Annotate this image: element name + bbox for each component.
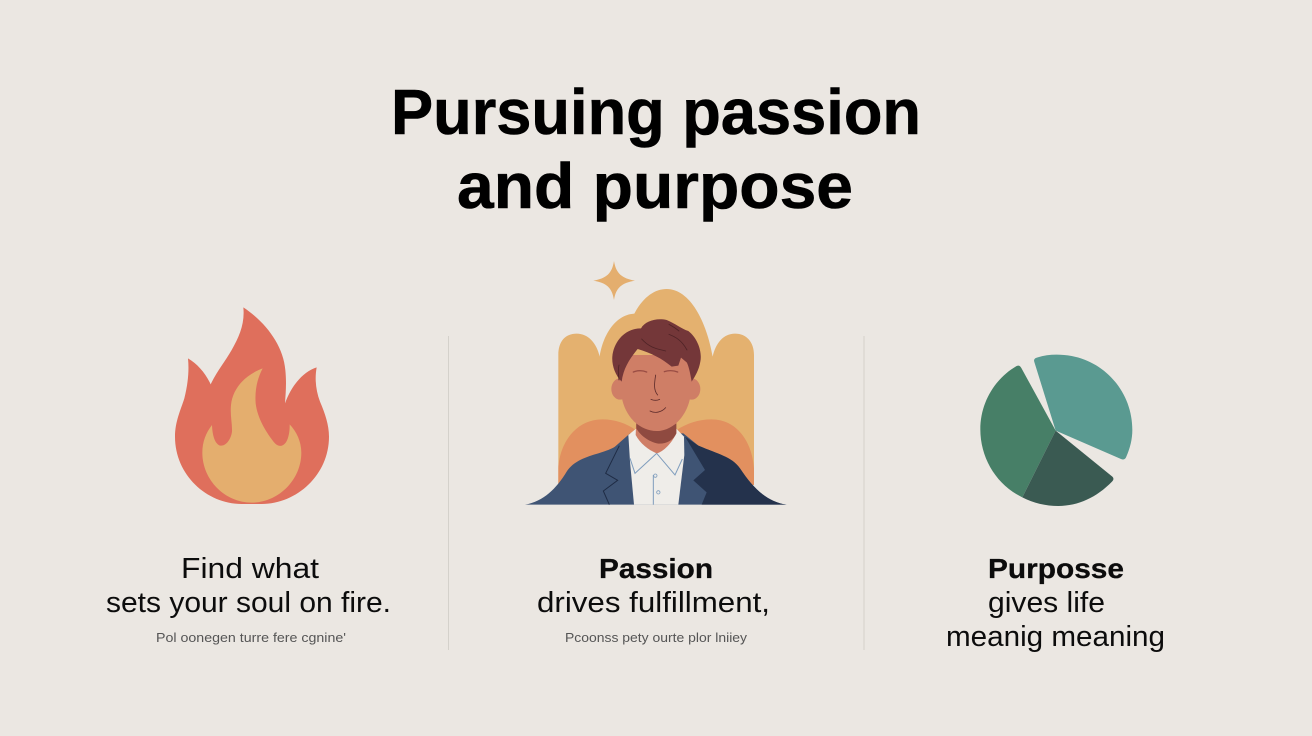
icon: flame: [175, 307, 329, 504]
jacket: [525, 433, 787, 505]
lapel lines: [603, 446, 619, 505]
title: [391, 76, 921, 222]
small print: Pol oonegen turre fere cgnine': [156, 630, 346, 645]
title: Pursuing passion: [391, 76, 921, 148]
caption: find what: sets your soul on fire.: [106, 587, 391, 619]
slice: teal: [1034, 355, 1132, 459]
caption: find what: [106, 553, 391, 619]
neck: [636, 418, 676, 453]
facial features: [618, 324, 687, 412]
caption: purpose gives life meaning: meanig meaning: [946, 621, 1165, 653]
hair: [612, 319, 701, 382]
face: [621, 355, 691, 431]
caption: purpose gives life meaning: gives life: [988, 587, 1105, 619]
collar lines: [630, 453, 682, 505]
panel: purpose gives life meaning: [946, 355, 1165, 653]
icon: person portrait: [525, 261, 787, 505]
icon: pie chart: [980, 355, 1132, 506]
panel: find what sets your soul on fire: [106, 307, 391, 645]
caption: purpose gives life meaning: [946, 553, 1165, 653]
slice: dark green: [1022, 431, 1113, 506]
caption: passion drives fulfillment: drives fulfillment,: [537, 587, 770, 619]
arched backdrop: [558, 289, 754, 485]
small print: Pcoonss pety ourte plor lniiey: [565, 630, 748, 645]
caption: passion drives fulfillment: [537, 553, 770, 619]
sparkle: [593, 261, 635, 300]
caption: purpose gives life meaning: Purposse: [988, 553, 1124, 584]
ears: [611, 378, 629, 400]
slice: green: [980, 366, 1056, 497]
orange shoulders glow: [558, 419, 754, 485]
caption: passion drives fulfillment: Passion: [599, 553, 713, 584]
panel: passion drives fulfillment: [525, 261, 787, 645]
title: and purpose: [457, 150, 853, 222]
caption: find what: Find what: [181, 553, 319, 585]
shirt: [628, 429, 684, 505]
